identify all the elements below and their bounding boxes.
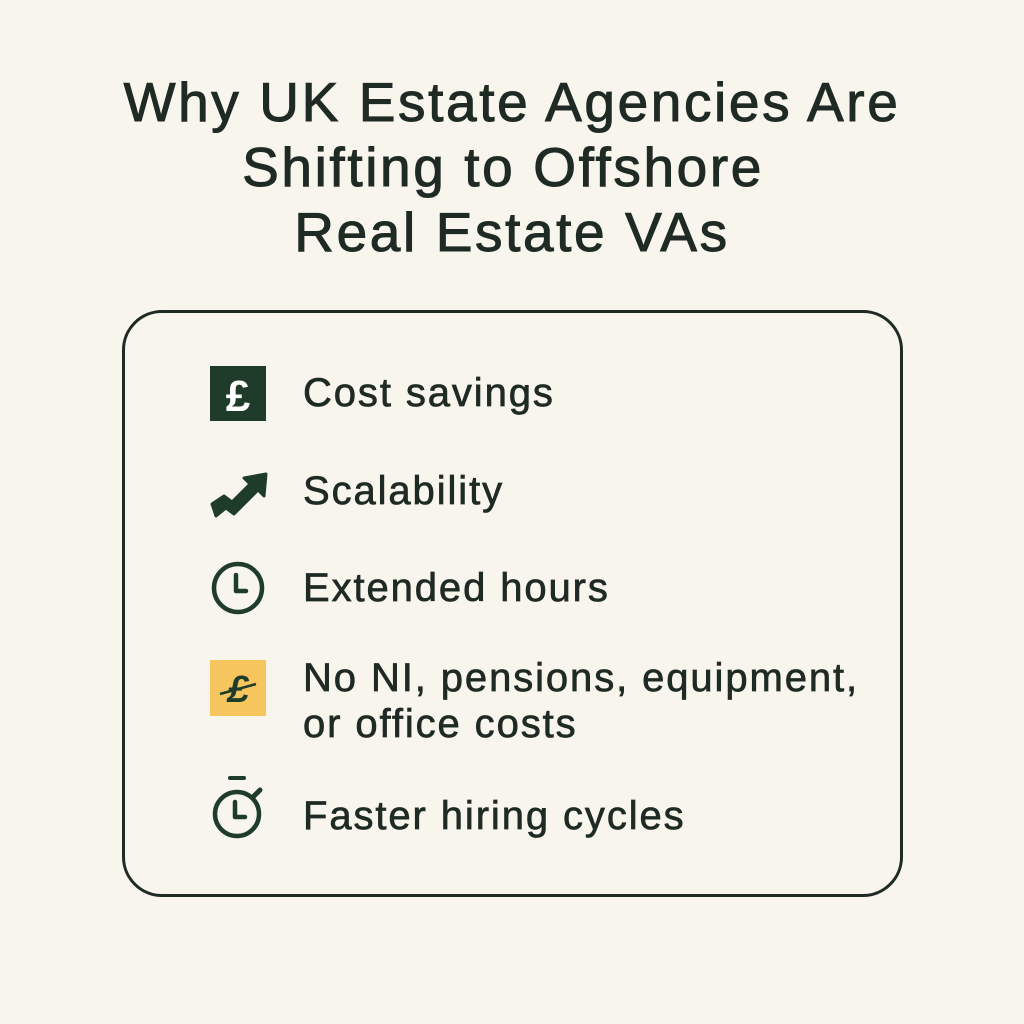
text: no NI costs xyxy=(303,656,859,746)
title: Shifting to Offshore xyxy=(242,136,764,198)
icon: pound box xyxy=(210,366,266,421)
icon: clock xyxy=(212,562,264,614)
icon: growth arrow xyxy=(210,472,268,518)
text: no NI costs: or office costs xyxy=(303,702,578,746)
icon: yellow pound xyxy=(210,660,266,716)
icon: yellow pound: £ xyxy=(226,669,249,711)
icon: stopwatch xyxy=(212,776,262,838)
title xyxy=(123,71,900,263)
text: cost savings: Cost savings xyxy=(303,371,555,415)
text: faster hiring: Faster hiring cycles xyxy=(303,794,686,838)
title: Why UK Estate Agencies Are xyxy=(124,71,900,133)
icon: pound box: £ xyxy=(226,372,251,421)
text: scalability: Scalability xyxy=(303,469,504,513)
panel: reasons card xyxy=(122,310,903,897)
text: no NI costs: No NI, pensions, equipment, xyxy=(303,656,859,700)
text: extended hours: Extended hours xyxy=(303,566,610,610)
title: Real Estate VAs xyxy=(294,201,730,263)
